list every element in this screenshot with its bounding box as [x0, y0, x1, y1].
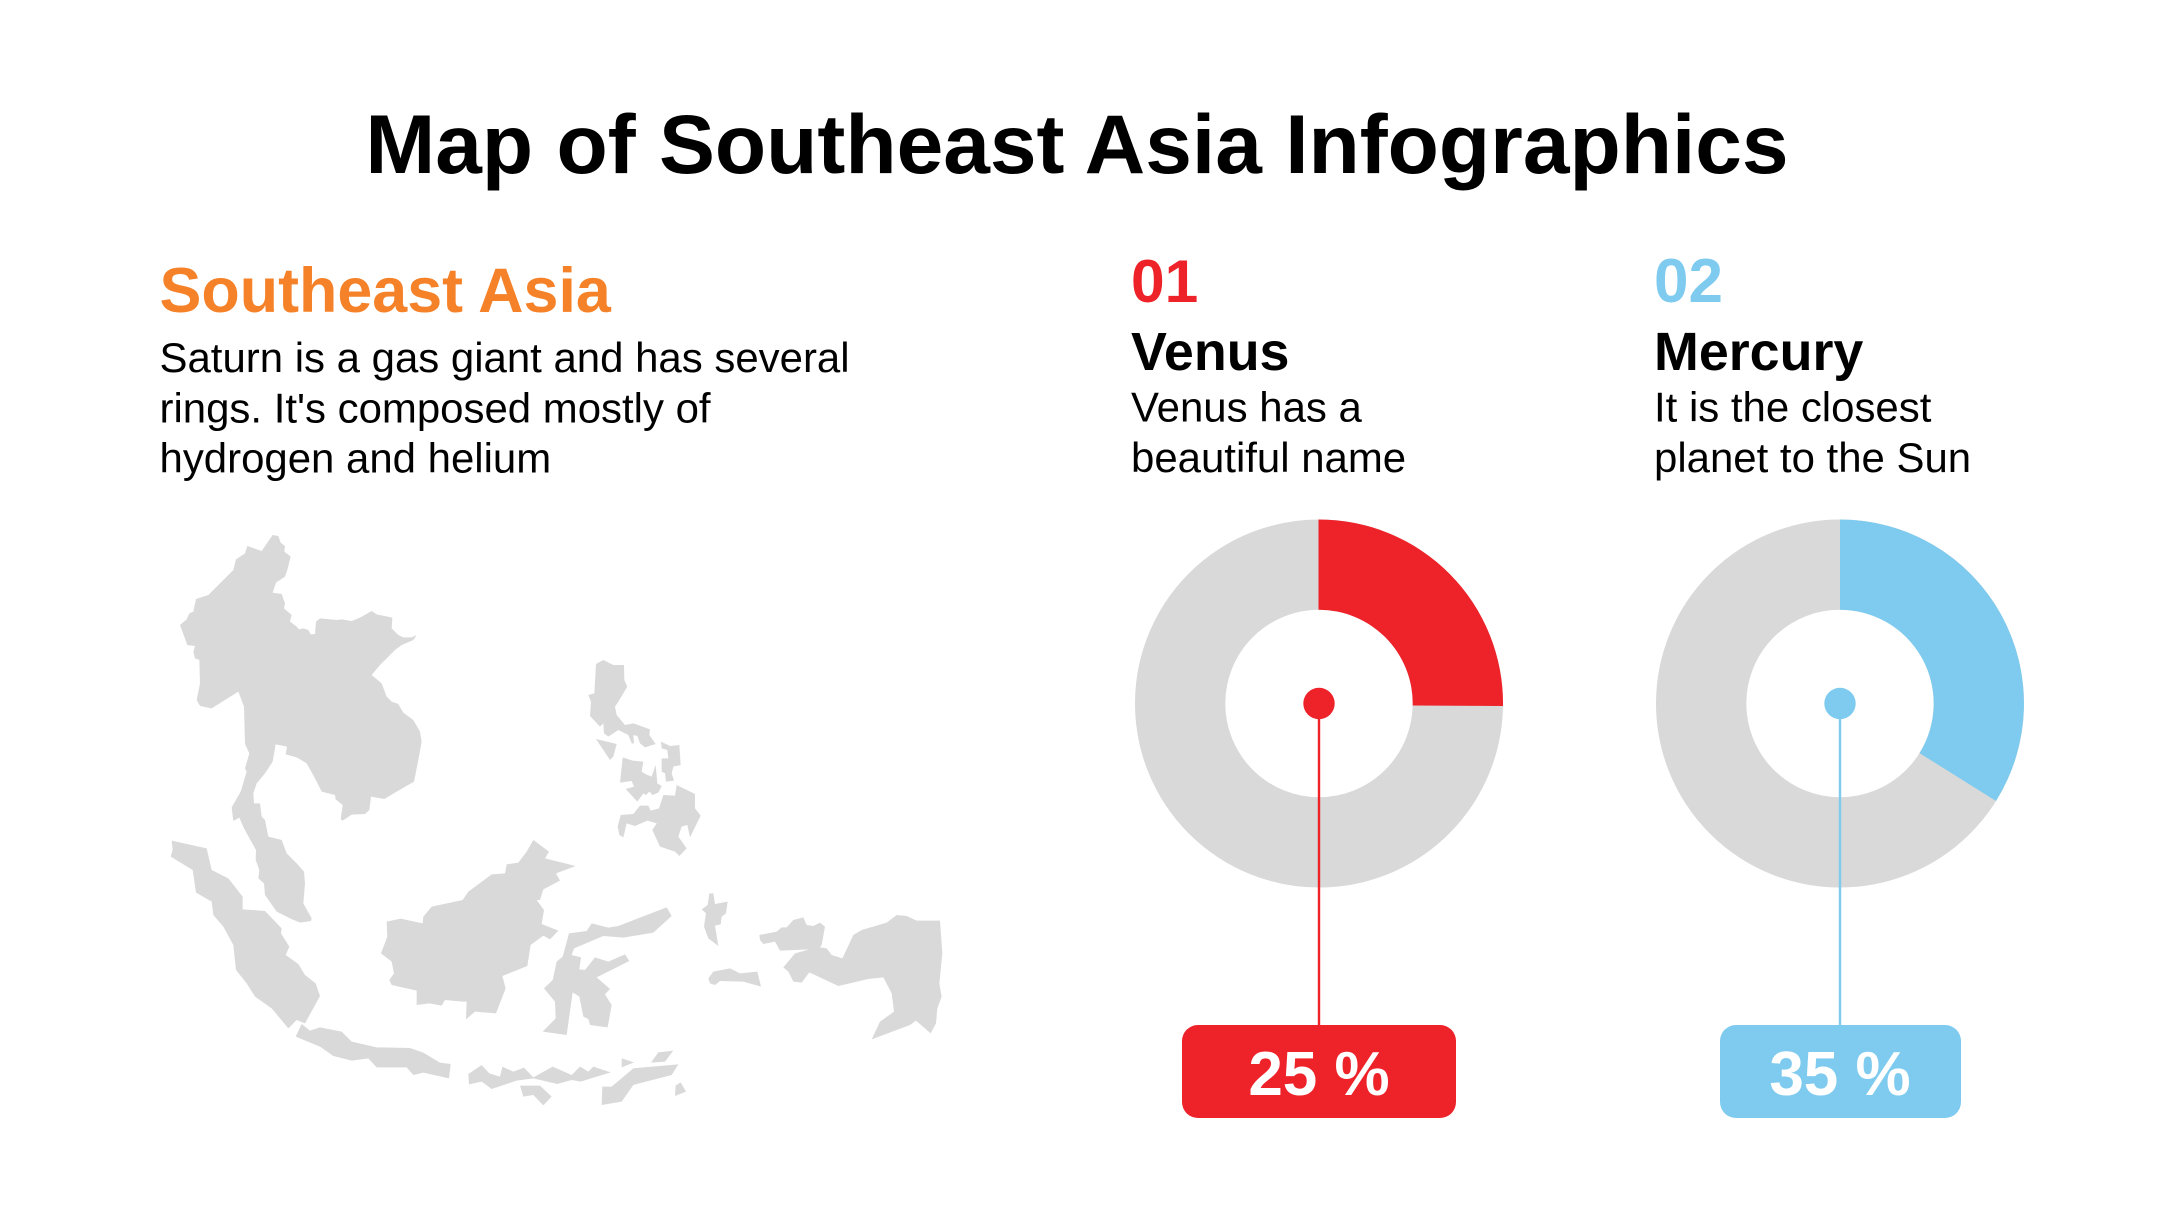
badge: 25 % — [1182, 1025, 1456, 1118]
text block: venus description: beautiful name — [1131, 434, 1406, 481]
panel: venus — [1131, 247, 1503, 1118]
donut chart: venus 25% — [1180, 519, 1503, 842]
text block: mercury description: planet to the Sun — [1654, 434, 1971, 481]
connector line and center dot — [1303, 688, 1335, 1026]
text block: mercury description — [1654, 384, 1971, 481]
heading: southeast asia: Southeast Asia — [160, 256, 612, 326]
badge: 35 %: 35 % — [1769, 1040, 1911, 1109]
map region: maluku and papua — [702, 893, 942, 1039]
map region: sumatra and java — [171, 841, 451, 1078]
text block: southeast asia body: hydrogen and helium — [160, 434, 551, 482]
heading: venus: Venus — [1131, 322, 1289, 382]
text block: venus description — [1131, 384, 1406, 481]
connector line and center dot — [1824, 688, 1856, 1026]
panel: mercury — [1654, 247, 2024, 1118]
text block: southeast asia body: rings. It's composed mostly of — [160, 384, 711, 432]
text block: mercury description: It is the closest — [1654, 384, 1932, 430]
map: southeast asia — [171, 535, 942, 1105]
map region: mainland southeast asia — [180, 535, 422, 923]
title: Map of Southeast Asia Infographics — [365, 97, 1789, 191]
number 02: 02 — [1654, 247, 1723, 316]
map region: borneo, sulawesi and lesser sunda islands — [381, 840, 686, 1105]
badge: 25 %: 25 % — [1248, 1040, 1390, 1109]
badge: 35 % — [1720, 1025, 1961, 1118]
text block: venus description: Venus has a — [1131, 384, 1363, 430]
heading: mercury: Mercury — [1654, 322, 1863, 382]
panel: southeast asia description — [160, 256, 850, 482]
text block: southeast asia body: Saturn is a gas giant and has several — [160, 334, 850, 381]
number 01: 01 — [1131, 247, 1198, 315]
donut chart: mercury 35% — [1701, 520, 2024, 842]
map region: philippines — [588, 660, 701, 856]
text block: southeast asia body — [160, 334, 850, 482]
